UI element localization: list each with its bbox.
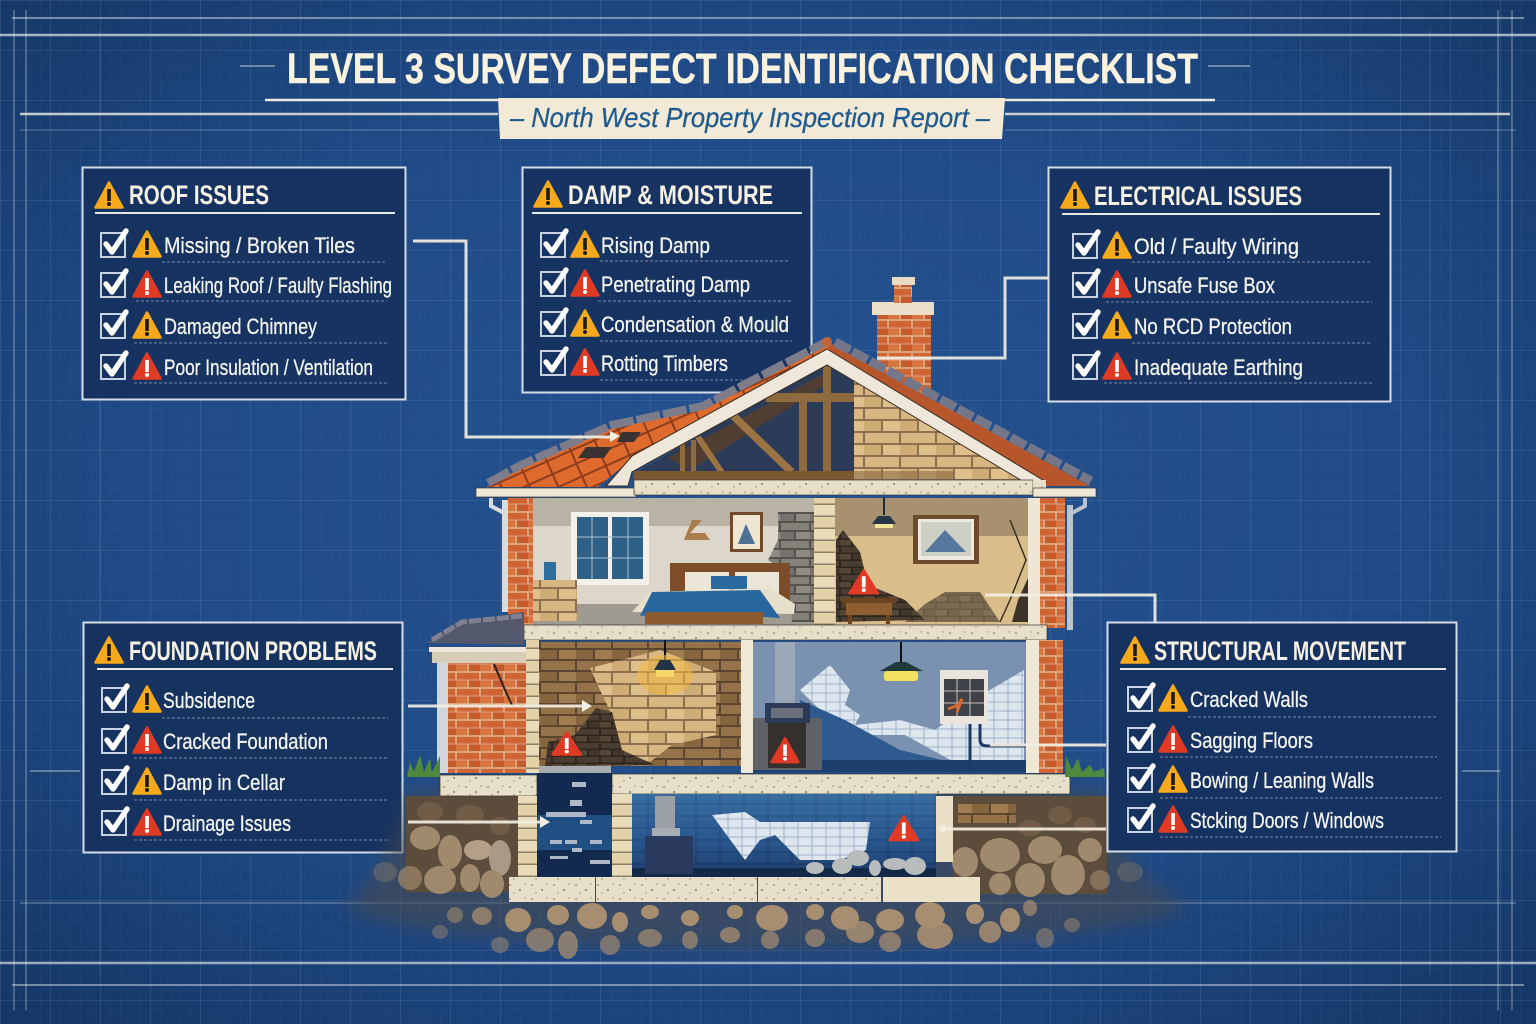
item: rising damp [541,231,790,261]
heading: damp and moisture: DAMP & MOISTURE [568,180,773,210]
boiler [753,718,822,770]
damaged bedroom wall [836,498,1028,624]
roof: right slope and tiles [486,337,1091,487]
item: damp in cellar: Damp in Cellar [163,770,285,795]
item: faulty wiring [1073,232,1372,262]
warning icon [772,738,798,762]
item: subsidence [102,686,388,718]
dresser [533,580,577,621]
grey exposed brick [768,512,814,622]
blue flooded room [753,642,1026,772]
item: bowing walls [1128,766,1441,798]
item: cracked walls [1128,685,1437,717]
gable interior with timbers [634,362,1026,482]
item: missing broken tiles [101,231,387,262]
ground slabs [440,766,1070,796]
item: sagging floors: Sagging Floors [1190,728,1313,753]
window [571,512,649,585]
connector: electrical issues to chimney [877,278,1048,358]
item: poor insulation: Poor Insulation / Ventilation [164,355,373,380]
panel: foundation problems [84,622,402,852]
heading: foundation problems [96,636,393,669]
item: unsafe fuse box: Unsafe Fuse Box [1134,273,1275,298]
panel: roof issues [82,168,406,400]
upper floor structure [491,498,1085,630]
house cutaway illustration [407,277,1105,902]
item: inadequate earthing [1073,353,1374,383]
item: missing broken tiles: Missing / Broken Tiles [164,233,355,258]
connector: structural movement to cracked wall [985,595,1155,622]
heading: roof issues: ROOF ISSUES [129,180,269,210]
pendant lamp [883,498,885,515]
connector: roof issues to roof [413,241,620,442]
cellar room with cracked brick [539,640,741,766]
pebble band under foundation [432,900,1080,959]
warning icon [553,732,581,755]
panel: electrical issues [1048,168,1390,402]
soil and rubble around foundations [345,790,1190,959]
basement room [632,794,953,877]
warning icon [850,570,878,593]
pipe [970,724,1026,770]
load bearing columns and right brick [526,640,1063,773]
item: leaking roof: Leaking Roof / Faulty Flashing [164,273,392,298]
item: cracked foundation [102,727,388,758]
item: cracked foundation: Cracked Foundation [163,729,328,754]
item: damaged chimney: Damaged Chimney [164,314,317,339]
item: drainage issues [102,809,390,840]
subtitle ribbon: – North West Property Inspection Report – [509,102,990,133]
side table [842,598,896,603]
item: rising damp: Rising Damp [601,233,710,258]
chimney [872,277,934,400]
item: sticking doors: Stcking Doors / Windows [1190,808,1384,833]
item: rotting timbers [541,349,745,380]
bedroom [533,512,814,624]
picture [913,515,979,564]
item: sticking doors [1128,806,1441,837]
heading: foundation problems: FOUNDATION PROBLEMS [129,636,377,666]
bed [670,563,790,613]
item: leaking roof [101,271,392,301]
item: poor insulation [101,353,389,383]
item: bowing walls: Bowing / Leaning Walls [1190,768,1374,793]
panel: structural movement [1108,622,1456,852]
item: cracked walls: Cracked Walls [1190,687,1308,712]
item: unsafe fuse box [1073,271,1372,302]
eaves and floor beams [476,480,1096,497]
mid floor slab [524,625,1047,640]
item: penetrating damp: Penetrating Damp [601,272,750,297]
item: no rcd protection: No RCD Protection [1134,314,1292,339]
crack damage patches [836,530,925,622]
item: no rcd protection [1073,312,1372,343]
small brick patch in soil [958,803,1016,823]
grass tufts [407,755,1105,777]
foundation footing [509,877,980,902]
connector: structural movement to flooded room [990,744,1106,746]
item: subsidence: Subsidence [163,688,255,713]
item: rotting timbers: Rotting Timbers [601,351,728,376]
pendant lamp [900,642,902,662]
item: drainage issues: Drainage Issues [163,811,291,836]
connector: foundation to cracked cellar wall [408,700,592,712]
item: damp in cellar [102,768,388,800]
item: damaged chimney [101,312,389,343]
flooded drainage shaft [518,773,632,877]
item: condensation and mould: Condensation & Mould [601,312,789,337]
side extension [427,612,526,773]
heading: structural movement: STRUCTURAL MOVEMENT [1154,636,1406,666]
connector: structural movement to basement [937,824,1106,834]
item: inadequate earthing: Inadequate Earthing [1134,355,1303,380]
connector: foundation to drainage shaft [408,816,550,828]
wall lamp [684,520,710,540]
title: LEVEL 3 SURVEY DEFECT IDENTIFICATION CHECKLIST [287,45,1198,93]
warning icon [890,816,918,840]
item: sagging floors [1128,726,1437,757]
heading: electrical issues: ELECTRICAL ISSUES [1094,181,1302,211]
wall picture [730,512,763,552]
small window [940,670,988,724]
item: faulty wiring: Old / Faulty Wiring [1134,234,1299,259]
panel: damp and moisture [522,168,812,392]
heading: roof issues [95,180,395,213]
item: condensation and mould [541,310,792,341]
item: penetrating damp [541,270,792,301]
